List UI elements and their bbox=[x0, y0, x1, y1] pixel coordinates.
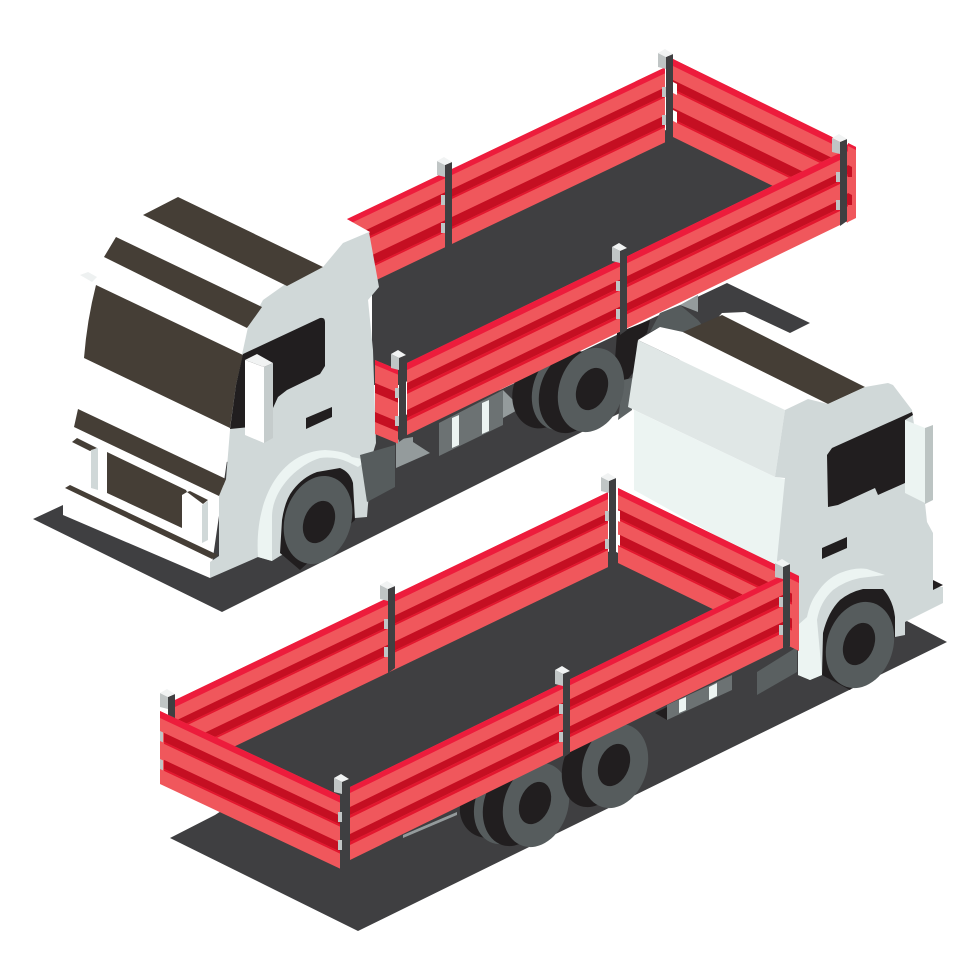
truck 1 bed floor bbox=[372, 130, 790, 385]
bumper tab bbox=[933, 580, 943, 590]
side window bbox=[827, 412, 913, 507]
cab side panel bbox=[775, 383, 943, 680]
truck 1 rear end rail bbox=[673, 59, 848, 223]
white roof bbox=[638, 327, 828, 410]
front wheel bbox=[273, 467, 363, 573]
truck 2 near posts bbox=[334, 559, 790, 866]
truck 2 rear wheels bbox=[452, 715, 659, 856]
roof marker bbox=[80, 272, 97, 282]
truck 1 far posts bbox=[437, 49, 677, 249]
cab white front bbox=[63, 160, 370, 578]
truck 1: upper truck facing left bbox=[33, 49, 856, 612]
truck 1 far side rail bbox=[345, 67, 665, 295]
side window bbox=[230, 318, 325, 429]
grille bbox=[65, 409, 226, 559]
truck 1 side chassis box bbox=[360, 445, 395, 502]
wheel arch bbox=[822, 589, 895, 690]
brown roof panel bbox=[683, 315, 865, 404]
truck 1 ground shadow bbox=[33, 283, 810, 612]
door handle bbox=[306, 407, 332, 429]
truck 2 near side rail bbox=[350, 575, 783, 860]
truck 2 rear end rail bbox=[618, 488, 799, 651]
front fender bbox=[258, 450, 367, 561]
windscreen bbox=[84, 285, 243, 428]
front fender bbox=[798, 568, 885, 680]
truck 2 chassis bbox=[403, 647, 797, 838]
upper back panel bbox=[628, 340, 785, 477]
truck 1 cab bbox=[63, 160, 379, 578]
front wheel arch bbox=[280, 468, 355, 570]
truck 1 chassis bbox=[396, 295, 698, 468]
truck 1 near posts bbox=[391, 134, 847, 442]
cab roof stripes bbox=[143, 197, 323, 286]
truck 1 rail end piece bbox=[848, 143, 856, 222]
truck 2 tail rail bbox=[160, 711, 340, 869]
truck 1 cab end rail bbox=[375, 360, 398, 444]
truck 1 rear wheels bbox=[503, 305, 702, 442]
truck 1 near side rail bbox=[407, 153, 840, 435]
lower back panel bbox=[634, 410, 785, 570]
cab side panel bbox=[210, 232, 379, 578]
truck 2 far side rail bbox=[175, 492, 608, 775]
truck 2 cab bbox=[628, 315, 943, 697]
mirror bbox=[245, 354, 273, 443]
truck 2 bed floor bbox=[235, 550, 725, 800]
truck 2 ground shadow bbox=[170, 620, 947, 931]
truck 2 far posts bbox=[160, 473, 620, 781]
truck 2: lower truck facing right bbox=[160, 315, 947, 931]
mirror bbox=[905, 420, 933, 504]
door handle bbox=[822, 537, 847, 559]
front wheel bbox=[815, 593, 905, 697]
